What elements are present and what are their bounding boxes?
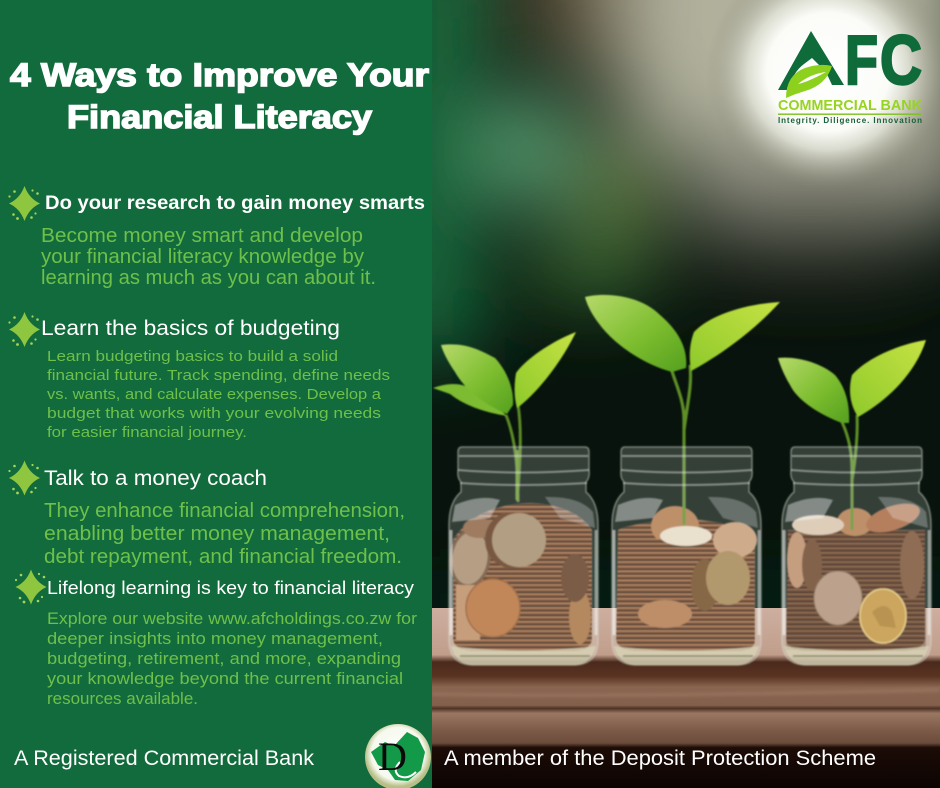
footer text left: A Registered Commercial Bank bbox=[14, 746, 314, 770]
photo background bbox=[380, 0, 940, 788]
icon: sparkle star bbox=[8, 186, 40, 221]
item 2: budgeting bbox=[8, 312, 390, 441]
text block: lifelong learning: resources available. bbox=[47, 689, 198, 708]
text block: money coach: debt repayment, and financial freedom. bbox=[44, 546, 402, 568]
text block: budgeting: Learn budgeting basics to build a solid bbox=[47, 348, 338, 365]
text block: research bbox=[41, 225, 376, 289]
icon: sparkle star bbox=[15, 570, 46, 604]
logo letters FC bbox=[845, 21, 922, 99]
coins in jar 1 bbox=[447, 503, 592, 651]
text block: budgeting: for easier financial journey. bbox=[47, 424, 247, 441]
text block: budgeting: vs. wants, and calculate expenses. Develop a bbox=[47, 386, 382, 403]
item 1: research bbox=[8, 186, 425, 289]
title: Financial Literacy bbox=[67, 99, 372, 135]
logo mark: A and leaf bbox=[778, 31, 844, 98]
seedling 1 bbox=[433, 332, 576, 502]
jar 1 with seedling and coins bbox=[433, 332, 598, 665]
text block: budgeting: budget that works with your evolving needs bbox=[47, 405, 381, 422]
wooden table bbox=[432, 608, 940, 788]
text block: lifelong learning: budgeting, retirement, and more, expanding bbox=[47, 649, 401, 668]
item 3: money coach bbox=[8, 460, 405, 568]
text block: lifelong learning: Explore our website www.afcholdings.co.zw for bbox=[47, 609, 417, 628]
logo tagline: Integrity. Diligence. Innovation bbox=[778, 116, 922, 125]
text block: research: your financial literacy knowledge by bbox=[41, 246, 364, 268]
footer text right: A member of the Deposit Protection Scheme bbox=[444, 747, 876, 770]
photo panel: seedlings in coin jars bbox=[380, 0, 940, 788]
text block: research: learning as much as you can about it. bbox=[41, 267, 376, 289]
title: 4 Ways to Improve Your bbox=[10, 57, 429, 93]
heading: budgeting: Learn the basics of budgeting bbox=[41, 317, 340, 340]
item 4: lifelong learning bbox=[15, 570, 417, 708]
coins in jar 2 bbox=[616, 506, 757, 651]
text block: lifelong learning: deeper insights into money management, bbox=[47, 629, 383, 648]
seedling 3 bbox=[778, 340, 926, 530]
heading: money coach: Talk to a money coach bbox=[44, 467, 267, 490]
logo letters FC: F bbox=[845, 21, 878, 99]
text block: budgeting bbox=[47, 348, 390, 441]
icon: sparkle star bbox=[8, 312, 40, 347]
text block: lifelong learning bbox=[47, 609, 417, 708]
logo: Deposit Protection badge: D bbox=[378, 734, 407, 779]
icon: sparkle star bbox=[8, 460, 40, 496]
logo: Deposit Protection badge bbox=[365, 724, 431, 788]
seedling 2 bbox=[585, 295, 780, 525]
heading: research: Do your research to gain money smarts bbox=[45, 193, 425, 214]
heading: lifelong learning: Lifelong learning is key to financial literacy bbox=[47, 577, 415, 598]
title bbox=[10, 57, 429, 135]
jar 2 with seedling and coins bbox=[585, 295, 780, 665]
logo letters FC: C bbox=[880, 21, 922, 99]
coins in jar 3 bbox=[786, 498, 926, 651]
left green panel bbox=[0, 0, 432, 788]
text block: money coach bbox=[44, 500, 405, 568]
text block: money coach: They enhance financial comprehension, bbox=[44, 500, 405, 522]
text block: money coach: enabling better money management, bbox=[44, 523, 390, 545]
logo: AFC Commercial Bank bbox=[778, 21, 922, 125]
text block: lifelong learning: your knowledge beyond the current financial bbox=[47, 669, 403, 688]
jar 3 with seedling and coins bbox=[778, 340, 931, 665]
text block: budgeting: financial future. Track spending, define needs bbox=[47, 367, 390, 384]
text block: research: Become money smart and develop bbox=[41, 225, 363, 247]
logo name: COMMERCIAL BANK bbox=[778, 97, 922, 114]
